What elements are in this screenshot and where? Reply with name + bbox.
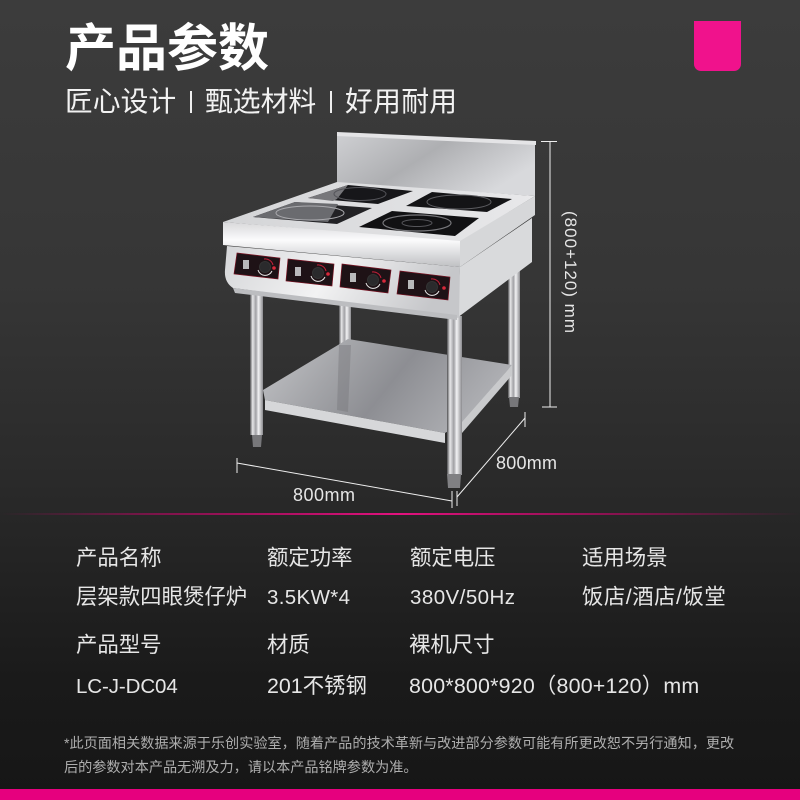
footnote: 后的参数对本产品无溯及力，请以本产品铭牌参数为准。	[64, 758, 418, 774]
spec: rated voltage: 额定电压	[410, 546, 496, 570]
spec: product name	[76, 546, 247, 609]
spec: rated power	[267, 546, 353, 609]
bottom pink bar	[0, 789, 800, 800]
width dimension line	[237, 458, 452, 508]
spec: bare dimensions: 800*800*920（800+120）mm	[409, 674, 699, 698]
spec: material: 材质	[267, 633, 310, 657]
control panels	[234, 253, 450, 300]
footnote	[64, 735, 734, 774]
back legs	[339, 262, 520, 407]
backsplash top edge	[337, 132, 536, 145]
width label: 800mm	[293, 485, 355, 505]
spec: model: 产品型号	[76, 633, 162, 657]
front legs	[250, 295, 462, 488]
footnote: *此页面相关数据来源于乐创实验室，随着产品的技术革新与改进部分参数可能有所更改恕不另行通知，更改	[64, 735, 734, 751]
depth label: 800mm	[496, 453, 557, 473]
subtitle: 好用耐用	[345, 86, 457, 117]
spec: bare dimensions: 裸机尺寸	[409, 633, 495, 657]
spec: product name: 产品名称	[76, 546, 162, 570]
brand logo block	[694, 21, 741, 71]
depth dimension line	[457, 412, 525, 506]
subtitle: 甄选材料	[205, 86, 316, 117]
subtitle: 匠心设计	[65, 86, 176, 117]
induction zones	[253, 185, 512, 236]
spec: usage scenarios	[582, 546, 726, 609]
spec: usage scenarios: 饭店/酒店/饭堂	[582, 585, 726, 609]
spec: material: 201不锈钢	[267, 674, 367, 698]
spec: model	[76, 633, 178, 698]
spec: rated voltage	[410, 546, 515, 609]
backsplash	[337, 133, 535, 196]
cooker body	[223, 196, 535, 320]
subtitle	[65, 86, 457, 117]
height dimension line	[541, 142, 557, 407]
spec: rated power: 3.5KW*4	[267, 586, 350, 609]
height label: (800+120) mm	[561, 211, 580, 333]
spec: material	[267, 633, 367, 698]
spec: rated power: 额定功率	[267, 546, 353, 570]
spec: usage scenarios: 适用场景	[582, 546, 668, 570]
title: 产品参数	[65, 20, 269, 77]
pink divider	[0, 513, 800, 515]
spec: product name: 层架款四眼煲仔炉	[76, 585, 247, 609]
lower shelf	[263, 339, 512, 443]
spec: model: LC-J-DC04	[76, 675, 178, 698]
stove top surface	[223, 182, 535, 242]
spec: rated voltage: 380V/50Hz	[410, 586, 515, 609]
spec: bare dimensions	[409, 633, 699, 698]
